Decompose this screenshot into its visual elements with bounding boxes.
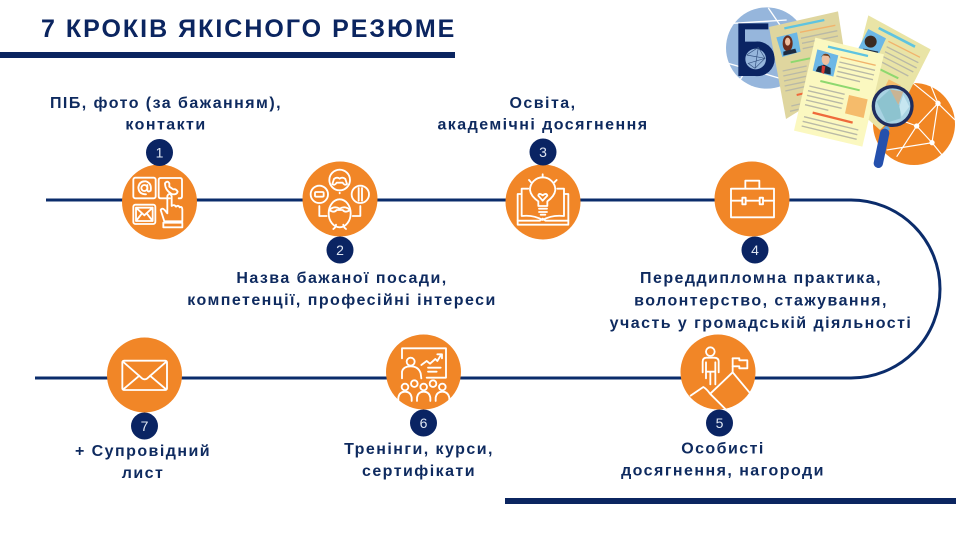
step 7 badge: 7: [141, 418, 149, 434]
blue globe: [726, 7, 807, 89]
icon: briefcase: [731, 181, 774, 217]
timeline path: [35, 200, 940, 378]
step 2 badge: 2: [336, 242, 344, 258]
step 4 label: участь у громадській діяльності: [610, 315, 912, 332]
title underline bar: [0, 52, 455, 58]
icon: envelope: [122, 361, 167, 390]
magnifying glass: [873, 87, 912, 163]
step 5 label: Особисті: [681, 440, 765, 458]
step 1 label: контакти: [125, 116, 207, 134]
step 7 label: лист: [122, 465, 164, 482]
step 7 circle: [107, 338, 182, 412]
step 6 label: Тренінги, курси,: [344, 441, 494, 458]
CV document back right: [847, 15, 931, 130]
CV document front: [794, 38, 884, 147]
step 1 badge: [146, 139, 173, 166]
step 4: [610, 162, 912, 332]
step 5 badge: [706, 410, 733, 436]
icon: person on mountain with flag: [691, 347, 749, 409]
step 6 badge: 6: [420, 415, 428, 431]
step 3: [437, 95, 649, 240]
bottom accent bar: [505, 498, 956, 504]
step 3 label: Освіта,: [510, 95, 576, 112]
step 4 badge: 4: [751, 242, 759, 258]
step 2 label: Назва бажаної посади,: [236, 270, 448, 287]
step 4 badge: [742, 236, 768, 264]
icon: person with interests: [311, 170, 369, 229]
step 5 circle: [680, 334, 756, 410]
step 3 label: академічні досягнення: [437, 116, 649, 134]
icon: contacts and hand: [133, 178, 182, 227]
step 2: [187, 162, 497, 309]
illustration: logo and CV documents: [726, 7, 955, 165]
step 6: [344, 334, 494, 480]
step 7: [75, 338, 211, 482]
step 5 label: досягнення, нагороди: [621, 462, 825, 480]
step 7 badge: [131, 412, 158, 440]
step 4 label: волонтерство, стажування,: [634, 292, 888, 310]
CV document back left: [769, 11, 844, 119]
step 1: [50, 95, 282, 240]
icon: book and light bulb: [518, 174, 568, 225]
orange globe: [873, 83, 955, 165]
icon: presenter and audience: [398, 348, 449, 401]
step 1 label: ПІБ, фото (за бажанням),: [50, 95, 282, 112]
step 1 badge: 1: [156, 144, 164, 160]
step 6 circle: [386, 334, 461, 410]
step 2 badge: [326, 236, 354, 264]
step 4 label: Переддипломна практика,: [640, 270, 882, 287]
step 1 circle: [122, 164, 197, 240]
step 6 label: сертифікати: [362, 463, 476, 480]
step 7 label: + Супровідний: [75, 443, 211, 460]
step 2 label: компетенції, професійні інтереси: [187, 292, 497, 309]
step 4 circle: [714, 162, 790, 236]
title: 7 КРОКІВ ЯКІСНОГО РЕЗЮМЕ: [41, 15, 456, 43]
step 5 badge: 5: [716, 415, 724, 431]
logo letter: [738, 23, 775, 76]
step 6 badge: [410, 410, 437, 436]
step 3 badge: [530, 138, 556, 166]
step 2 circle: [302, 162, 378, 236]
step 3 badge: 3: [539, 144, 547, 160]
step 3 circle: [506, 164, 580, 240]
step 5: [621, 334, 825, 480]
